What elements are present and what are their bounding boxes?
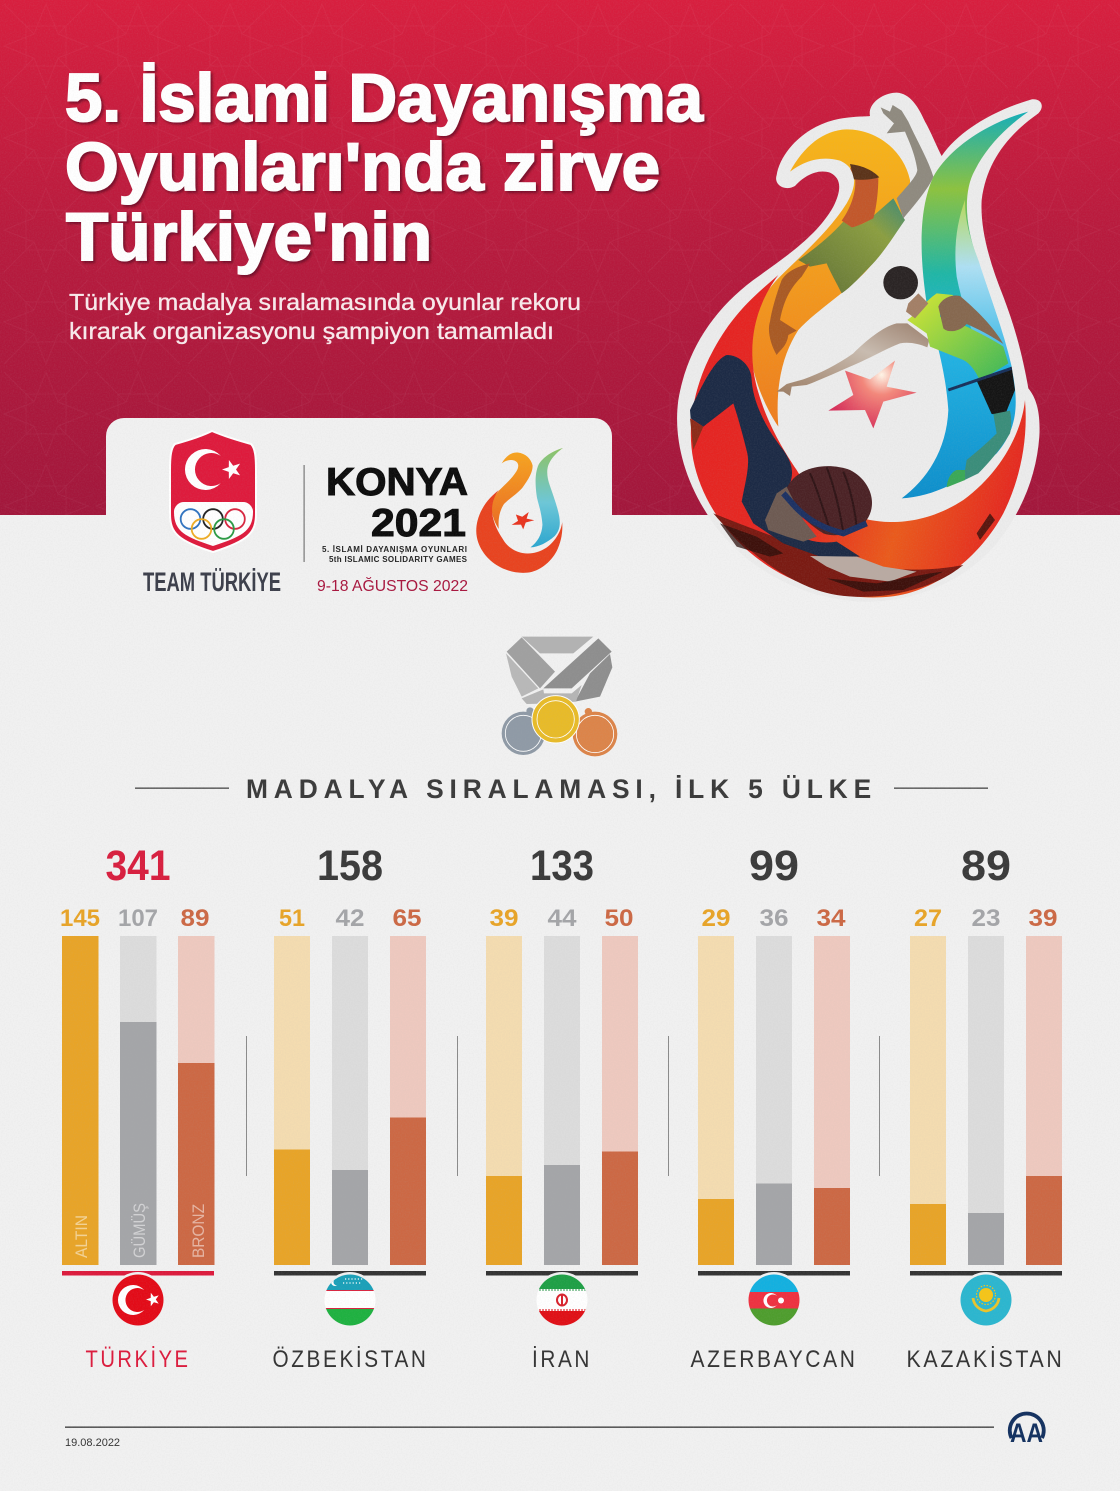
divider <box>304 465 305 562</box>
medal counts: 51 <box>279 905 305 932</box>
games name: 5th ISLAMIC SOLIDARITY GAMES <box>329 555 468 564</box>
panel: Özbekistan <box>272 842 428 1373</box>
medal counts: 44 <box>548 905 577 932</box>
country name: AZERBAYCAN <box>690 1346 858 1373</box>
bar chart <box>698 936 850 1265</box>
panel: Türkiye <box>60 842 214 1373</box>
bar chart: BRONZ <box>189 1204 208 1258</box>
medal counts <box>702 905 846 932</box>
panel: logo card <box>106 418 612 520</box>
icon: medals <box>502 637 617 756</box>
konya wordmark: KONYA <box>326 461 468 504</box>
country name: ÖZBEKİSTAN <box>272 1346 428 1373</box>
title <box>65 60 704 275</box>
bronze medal <box>573 708 617 756</box>
medal counts <box>490 905 634 932</box>
medal counts: 23 <box>972 905 1000 932</box>
panel: Azerbaycan <box>690 842 858 1373</box>
bar chart: GÜMÜŞ <box>130 1203 149 1258</box>
gold medal <box>532 695 579 743</box>
bar chart <box>486 936 638 1265</box>
flag: İran <box>536 1272 588 1326</box>
title: Türkiye'nin <box>66 199 432 275</box>
medal counts: 36 <box>760 905 788 932</box>
medal counts: 65 <box>392 905 422 932</box>
star <box>828 361 917 428</box>
dates: 9-18 AĞUSTOS 2022 <box>317 576 468 595</box>
jumper athlete <box>769 105 933 355</box>
total: 89 <box>961 842 1011 890</box>
flag: Özbekistan <box>324 1272 376 1326</box>
panel: Kazakistan <box>906 842 1064 1373</box>
medal counts <box>914 905 1058 932</box>
bar chart <box>274 936 426 1265</box>
total: 158 <box>317 842 383 890</box>
medal counts: 27 <box>914 905 942 932</box>
medal counts: 39 <box>1028 905 1058 932</box>
date: 19.08.2022 <box>65 1437 120 1449</box>
medal counts: 89 <box>180 905 210 932</box>
silver medal <box>502 707 545 755</box>
medal counts <box>60 905 210 932</box>
country name: KAZAKİSTAN <box>906 1346 1064 1373</box>
total: 99 <box>749 842 799 890</box>
logo: Team Türkiye <box>143 431 281 597</box>
year: 2021 <box>371 502 466 545</box>
light streak <box>955 200 1012 367</box>
flag: Türkiye <box>110 1272 166 1328</box>
flag: Kazakistan <box>958 1272 1014 1328</box>
red crescent <box>691 275 1026 597</box>
swimmer athlete <box>690 355 995 597</box>
flag: Azerbaycan <box>748 1272 800 1326</box>
medal counts: 42 <box>336 905 364 932</box>
icon: AA logo: AA <box>1010 1418 1043 1448</box>
mini flame <box>476 448 563 573</box>
medal counts: 34 <box>816 905 846 932</box>
shield <box>170 431 256 552</box>
games name: 5. İSLAMİ DAYANIŞMA OYUNLARI <box>322 545 467 554</box>
orange band <box>750 129 910 427</box>
medal counts: 145 <box>60 905 100 932</box>
subtitle: Türkiye madalya sıralamasında oyunlar rekoru <box>69 289 581 315</box>
country name: TÜRKİYE <box>86 1346 190 1373</box>
total: 133 <box>530 842 594 890</box>
bar chart: ALTIN <box>72 1215 91 1258</box>
title: 5. İslami Dayanışma <box>65 60 704 136</box>
games name <box>322 545 468 564</box>
bar chart <box>62 936 214 1265</box>
subtitle: kırarak organizasyonu şampiyon tamamladı <box>69 318 554 344</box>
footer rule <box>65 1426 994 1428</box>
logo: Konya 2021 <box>317 448 563 595</box>
medal counts: 107 <box>118 905 158 932</box>
column dividers <box>246 1036 880 1176</box>
flame halo <box>677 93 1042 602</box>
panel: İran <box>486 842 638 1373</box>
medal counts: 50 <box>604 905 634 932</box>
crescent and star <box>185 449 240 490</box>
shield lower panel <box>174 502 253 546</box>
section heading: MADALYA SIRALAMASI, İLK 5 ÜLKE <box>246 774 877 804</box>
total: 341 <box>106 842 170 890</box>
bar chart <box>910 936 1062 1265</box>
medal counts: 39 <box>490 905 518 932</box>
medal counts <box>279 905 422 932</box>
wordmark: TEAM TÜRKİYE <box>143 567 281 597</box>
runner athlete <box>777 266 1015 487</box>
title: Oyunları'nda zirve <box>65 129 660 205</box>
emblem: flame with athletes <box>677 93 1042 602</box>
subtitle <box>69 289 581 344</box>
blue green wing <box>902 112 1028 498</box>
olympic rings <box>181 509 245 539</box>
red header band <box>0 0 1120 515</box>
medal counts: 29 <box>702 905 730 932</box>
country name: İRAN <box>532 1346 592 1373</box>
